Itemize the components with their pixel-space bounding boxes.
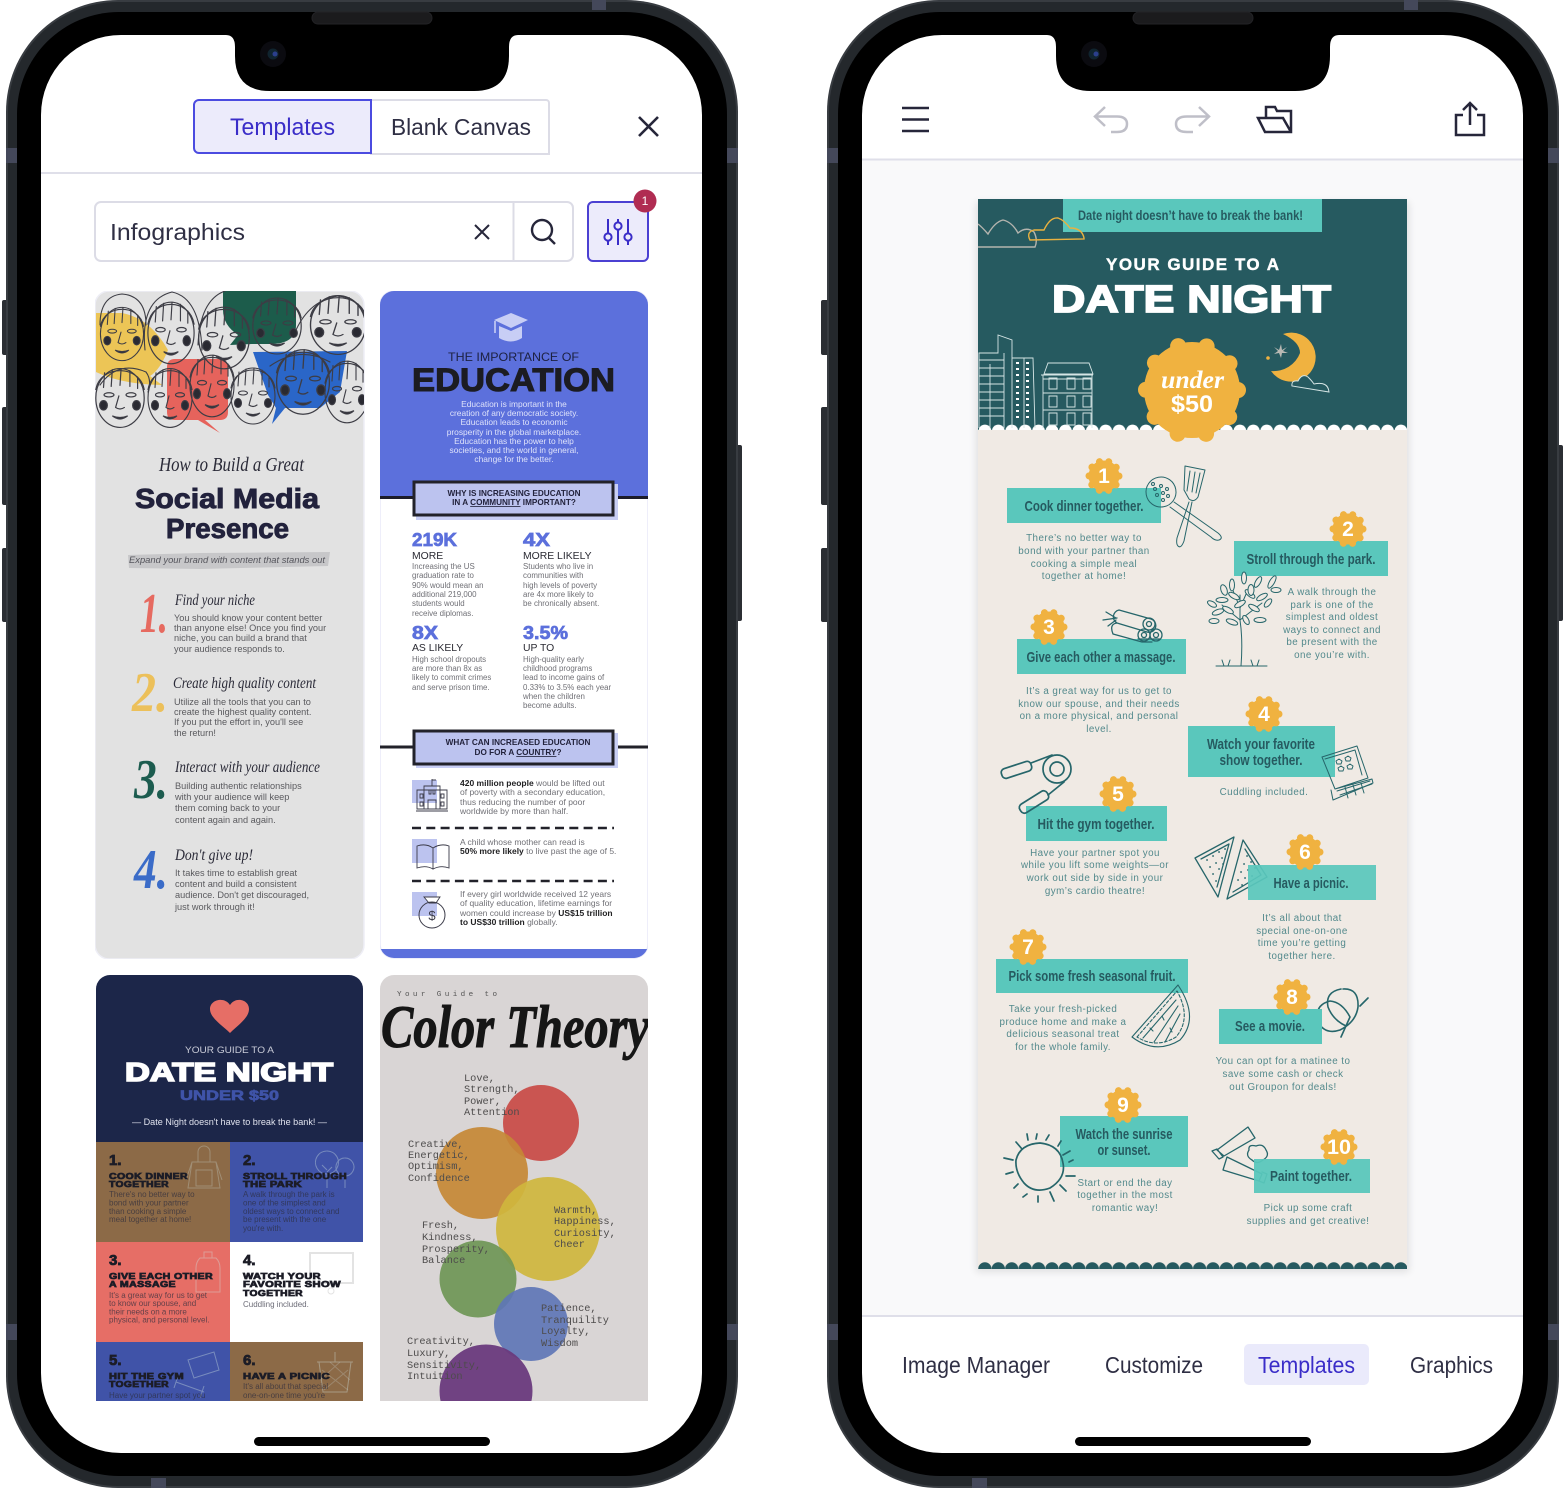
stat: 8X: 8X — [412, 623, 438, 643]
editor toolbar — [862, 103, 1523, 160]
step 5: gym: while you lift some weights—or — [1020, 860, 1169, 871]
step 5: gym: Have your partner spot you — [1030, 848, 1160, 859]
color meanings: Power, — [464, 1096, 501, 1108]
cell 2: stroll through the park: you're with. — [243, 1224, 283, 1233]
color meanings: Kindness, — [422, 1232, 478, 1244]
step 3: massage: Give each other a massage. — [1026, 649, 1176, 666]
tip 4: content and build a consistent — [175, 879, 297, 889]
stat: 3.5%: 0.33% to 3.5% each year — [523, 683, 612, 692]
step 7: seasonal fruit: Take your fresh-picked — [1009, 1004, 1117, 1015]
stat: 8X: are more than 8x as — [412, 664, 482, 673]
color theory title: Your Guide to — [397, 991, 500, 999]
callout: community question — [414, 482, 618, 520]
navy card heading: DATE NIGHT — [125, 1057, 333, 1087]
step 1: cook dinner: together at home! — [1042, 571, 1126, 582]
cell 3: massage: physical, and personal level. — [109, 1316, 210, 1324]
cell 1: cook dinner — [96, 1142, 230, 1242]
poster title — [1054, 258, 1332, 314]
step 1: cook dinner: Cook dinner together. — [1024, 498, 1144, 515]
tip 1 — [140, 583, 326, 654]
stat: 4X: communities with — [523, 571, 584, 580]
stat: 219K: 90% would mean an — [412, 581, 484, 590]
cell 3: massage — [96, 1242, 230, 1342]
cell 1: cook dinner: than cooking a simple — [109, 1207, 187, 1216]
cell 3: massage: A MASSAGE — [109, 1279, 176, 1289]
cell 6: picnic — [230, 1342, 363, 1401]
color meanings: Happiness, — [554, 1216, 616, 1228]
color meanings: Wisdom — [541, 1338, 578, 1350]
filter button: 1 — [642, 194, 649, 208]
cell 4: favorite show: 4. — [243, 1252, 256, 1269]
poster title: YOUR GUIDE TO A — [1106, 255, 1279, 274]
step 10: paint together: 10 — [1327, 1136, 1351, 1159]
card title: Social Media — [135, 483, 319, 514]
education intro text: Education has the power to help — [454, 436, 574, 446]
cell 4: favorite show: WATCH YOUR — [243, 1271, 322, 1281]
cell 6: picnic: HAVE A PICNIC — [243, 1371, 330, 1381]
cell 1: cook dinner: bond with your partner — [109, 1198, 189, 1208]
education intro text — [447, 399, 581, 464]
step 8: movie: See a movie. — [1235, 1018, 1305, 1035]
cell 1: cook dinner: meal together at home! — [109, 1215, 191, 1224]
step 4: favorite show: Watch your favorite — [1207, 736, 1315, 753]
tip 3: Building authentic relationships — [175, 781, 302, 791]
fact: 420 million people: 420 million people would be lifted out — [460, 778, 605, 788]
step 5: gym: 5 — [1112, 783, 1124, 806]
cell 2: stroll through the park: oldest ways to connect and — [243, 1207, 340, 1216]
step 1: cook dinner: There’s no better way to — [1026, 533, 1142, 544]
card title: Presence — [166, 513, 289, 544]
tip 3: content again and again. — [175, 815, 276, 825]
cell 2: stroll through the park: be present with the one — [243, 1215, 327, 1224]
stat: 3.5%: 3.5% — [523, 623, 568, 643]
color meanings: Warmth, — [554, 1205, 597, 1217]
tip 3: Interact with your audience — [174, 759, 320, 776]
color meanings: Loyalty, — [541, 1326, 590, 1338]
clouds — [978, 218, 1084, 247]
step 5: gym: gym’s cardio theatre! — [1045, 886, 1145, 897]
stat: 3.5%: High-quality early — [523, 655, 584, 664]
color meanings: Confidence — [408, 1173, 470, 1185]
color meanings: Attention — [464, 1107, 520, 1119]
fact: 420 million people — [412, 778, 605, 816]
stat: 4X: high levels of poverty — [523, 581, 597, 590]
cell 5: gym: TOGETHER — [109, 1379, 170, 1389]
icon: redo — [1176, 107, 1209, 132]
bottom tab bar: Image Manager — [902, 1352, 1050, 1378]
stat: 219K: students would — [412, 599, 465, 608]
right phone frame — [821, 0, 1563, 1488]
step 3: massage: know our spouse, and their needs — [1018, 699, 1180, 710]
icon: sun — [1004, 1134, 1075, 1202]
bottom tab bar: Graphics — [1410, 1352, 1493, 1378]
tip 1: than anyone else! Once you find your — [174, 623, 326, 633]
poster shadow — [976, 202, 1409, 1272]
illustration: crowd of faces with speech bubbles — [96, 291, 369, 433]
step 3: massage: on a more physical, and personal — [1020, 711, 1178, 722]
banner — [1063, 199, 1322, 232]
icon: pretzel — [1317, 989, 1368, 1037]
color meanings: Curiosity, — [554, 1228, 616, 1240]
step 2: stroll through the park: simplest and oldest — [1286, 612, 1378, 623]
color meanings: Balance — [422, 1255, 465, 1267]
education intro text: creation of any democratic society. — [450, 408, 578, 418]
stat: 4X: 4X — [523, 530, 550, 550]
cell 2: stroll through the park — [230, 1142, 363, 1242]
step 4: favorite show: Cuddling included. — [1220, 787, 1308, 798]
tip 4: audience. Don't get discouraged, — [175, 890, 309, 900]
navy card heading: — Date Night doesn't have to break the bank! — — [132, 1117, 327, 1127]
icon: sandwich — [1195, 837, 1267, 899]
education title: EDUCATION — [412, 362, 615, 398]
left phone header tabs: Blank Canvas — [391, 114, 531, 140]
step 6: picnic: time you’re getting — [1258, 938, 1346, 949]
card title — [128, 454, 330, 569]
illustration: city buildings — [979, 335, 1093, 428]
cell 2: stroll through the park: A walk through the park is — [243, 1190, 335, 1199]
card: date night navy — [96, 975, 363, 1401]
cell 2: stroll through the park: THE PARK — [243, 1179, 303, 1189]
stat: 8X: likely to commit crimes — [412, 673, 491, 682]
fact: mother can read — [412, 837, 616, 869]
card title: Expand your brand with content that stands out — [129, 555, 325, 565]
color circles — [436, 1085, 600, 1401]
banner: Date night doesn’t have to break the bank! — [1078, 207, 1303, 223]
color meanings: Luxury, — [407, 1348, 450, 1360]
step 9: sunrise: Start or end the day — [1077, 1178, 1173, 1189]
icon: laptop — [1322, 746, 1373, 800]
left phone header tabs: Templates — [230, 114, 335, 141]
fact: mother can read: 50% more likely to live past the age of 5. — [460, 846, 616, 856]
editor canvas background — [862, 160, 1523, 1315]
under $50 badge: under — [1161, 367, 1224, 394]
step 2: stroll through the park — [1206, 514, 1388, 666]
education intro text: change for the better. — [474, 454, 554, 464]
search bar: Infographics — [110, 219, 245, 245]
step 6: picnic — [1195, 836, 1376, 962]
card: importance of education — [380, 291, 648, 959]
cell 6: picnic: 6. — [243, 1352, 256, 1369]
stat: 3.5%: lead to income gains of — [523, 673, 605, 682]
step 8: movie: save some cash or check — [1223, 1069, 1343, 1080]
icon: share — [1456, 103, 1484, 135]
color meanings: Prosperity, — [422, 1244, 490, 1256]
step 5: gym — [1000, 755, 1169, 897]
tip 1: Find your niche — [174, 592, 255, 609]
search bar — [95, 202, 573, 261]
step 2: stroll through the park: one you’re with. — [1294, 650, 1370, 661]
fact: girl education earnings — [412, 889, 613, 928]
step 1: cook dinner — [1007, 460, 1221, 582]
stat: 3.5%: when the children — [522, 692, 585, 701]
cell 6: picnic: It's all about that special — [243, 1382, 328, 1391]
cell 2: stroll through the park: 2. — [243, 1152, 256, 1169]
color meanings: Energetic, — [408, 1150, 470, 1162]
stat: 8X — [412, 623, 491, 692]
bottom tab bar: Templates — [1258, 1352, 1355, 1378]
tip 2: Create high quality content — [173, 675, 316, 692]
tip 1: You should know your content better — [174, 613, 322, 623]
cell 5: gym: 5. — [109, 1352, 122, 1369]
tip 4: It takes time to establish great — [175, 868, 297, 878]
step 7: seasonal fruit — [996, 932, 1190, 1053]
cell 3: massage: to know our spouse, and — [109, 1299, 196, 1308]
callout: country question: DO FOR A COUNTRY? — [475, 748, 561, 757]
step 7: seasonal fruit: delicious seasonal treat — [1006, 1029, 1120, 1040]
under $50 badge: $50 — [1171, 391, 1213, 418]
fact: girl education earnings: If every girl worldwide received 12 years — [460, 889, 611, 899]
color meanings: Strength, — [464, 1084, 520, 1096]
tip 4: Don't give up! — [174, 847, 253, 864]
card title: How to Build a Great — [158, 454, 304, 476]
callout: community question: IN A COMMUNITY IMPORTANT? — [452, 498, 576, 507]
icon: menu — [902, 108, 929, 131]
tip 2: If you put the effort in, you'll see — [174, 717, 303, 727]
color meanings: Creativity, — [407, 1336, 475, 1348]
navy card heading: YOUR GUIDE TO A — [185, 1044, 275, 1055]
tip 2 — [131, 662, 316, 738]
icon: heart — [210, 1000, 249, 1033]
tip 2: 2. — [131, 662, 168, 724]
education intro text: societies, and the world in general, — [450, 445, 578, 455]
stat: 3.5%: become adults. — [523, 701, 577, 710]
tip 2: the return! — [174, 728, 216, 738]
stat: 3.5% — [522, 623, 612, 710]
step 9: sunrise — [1004, 1090, 1188, 1214]
step 7: seasonal fruit: 7 — [1022, 936, 1034, 959]
color meanings: Intuition — [407, 1371, 463, 1383]
bottom tab bar: Customize — [1105, 1352, 1203, 1378]
step 1: cook dinner: bond with your partner than — [1018, 546, 1150, 557]
fact: 420 million people: of poverty with a secondary education, — [460, 787, 605, 797]
illustration: moon and stars — [1266, 333, 1329, 392]
stat: 219K: 219K — [412, 530, 457, 550]
fact: 420 million people: worldwide by more than half. — [459, 806, 568, 816]
step 2: stroll through the park: park is one of the — [1290, 600, 1374, 611]
step 3: massage: 3 — [1043, 616, 1055, 639]
step 9: sunrise: romantic way! — [1092, 1203, 1158, 1214]
cell 4: favorite show: Cuddling included. — [243, 1300, 309, 1309]
callout: country question — [380, 731, 648, 768]
color meanings: Cheer — [554, 1239, 585, 1251]
under $50 badge — [1144, 342, 1240, 438]
step 3: massage — [1017, 610, 1186, 735]
color meanings: Tranquility — [541, 1315, 609, 1327]
left phone frame — [2, 0, 742, 1488]
color meanings — [407, 1073, 616, 1383]
cell 4: favorite show: TOGETHER — [243, 1288, 304, 1298]
hair outlines — [100, 291, 366, 392]
stat: 4X: Students who live in — [523, 562, 593, 571]
stat: 219K — [412, 530, 484, 618]
cell 3: massage: 3. — [109, 1252, 122, 1269]
icon: spoon and spatula — [1140, 466, 1221, 547]
tip 2: create the highest quality content. — [174, 707, 311, 717]
step 10: paint together — [1212, 1127, 1370, 1227]
cell 3: massage: GIVE EACH OTHER — [109, 1271, 214, 1281]
stat: 3.5%: UP TO — [523, 643, 554, 654]
tip 3 — [133, 749, 320, 825]
stat: 8X: High school dropouts — [412, 655, 486, 664]
tip 4: 4. — [133, 839, 168, 901]
stat: 8X: and serve prison time. — [412, 683, 490, 692]
stat: 219K: graduation rate to — [412, 571, 474, 580]
icon: citrus slice — [1132, 985, 1190, 1047]
step 6: picnic: together here. — [1268, 951, 1336, 962]
stat: 4X: be chronically absent. — [523, 599, 599, 608]
tip 1: your audience responds to. — [174, 644, 285, 654]
cell 1: cook dinner: TOGETHER — [109, 1179, 170, 1189]
step 10: paint together: Paint together. — [1270, 1168, 1352, 1185]
stat: 219K: MORE — [412, 551, 443, 562]
step 1: cook dinner: cooking a simple meal — [1031, 559, 1137, 570]
step 2: stroll through the park: ways to connect and — [1282, 625, 1381, 636]
tip 2: Utilize all the tools that you can to — [174, 697, 311, 707]
step 10: paint together: Pick up some craft — [1264, 1203, 1352, 1214]
step 7: seasonal fruit: produce home and make a — [1000, 1017, 1127, 1028]
step 2: stroll through the park: Stroll through the park. — [1246, 551, 1376, 568]
stat: 3.5%: childhood programs — [523, 664, 592, 673]
stat: 8X: AS LIKELY — [412, 643, 463, 654]
step 2: stroll through the park: 2 — [1342, 518, 1354, 541]
step 7: seasonal fruit: for the whole family. — [1015, 1042, 1111, 1053]
education title — [412, 350, 615, 398]
tip 1: 1. — [140, 583, 168, 645]
cell 3: massage: It's a great way for us to get — [109, 1291, 208, 1300]
tip 4 — [133, 839, 309, 912]
step 6: picnic: special one-on-one — [1256, 926, 1348, 937]
step 9: sunrise: 9 — [1117, 1094, 1129, 1117]
color theory title: Color Theory — [381, 994, 649, 1060]
step 6: picnic: 6 — [1299, 841, 1311, 864]
stat: 219K: receive diplomas. — [412, 609, 473, 618]
step 4: favorite show — [1188, 698, 1373, 800]
step 8: movie: out Groupon for deals! — [1229, 1082, 1337, 1093]
color meanings: Creative, — [408, 1139, 464, 1151]
step 6: picnic: Have a picnic. — [1274, 875, 1348, 892]
callout: community question: WHY IS INCREASING EDUCATION — [448, 489, 581, 498]
poster title: DATE NIGHT — [1052, 279, 1331, 321]
icon: undo — [1095, 107, 1127, 132]
step 9: sunrise: Watch the sunrise — [1076, 1126, 1172, 1143]
step 9: sunrise: together in the most — [1077, 1190, 1173, 1201]
icon: graduation cap — [494, 313, 528, 342]
tip 3: 3. — [133, 749, 168, 811]
step 6: picnic: It’s all about that — [1262, 913, 1342, 924]
step 10: paint together: supplies and get creative! — [1247, 1216, 1369, 1227]
cell 5: gym — [96, 1342, 230, 1401]
fact: girl education earnings: to US$30 trillion globally. — [460, 917, 558, 927]
step 1: cook dinner: 1 — [1098, 465, 1110, 488]
step 3: massage: It’s a great way for us to get to — [1026, 686, 1172, 697]
cell 5: gym: Have your partner spot you — [109, 1391, 206, 1400]
step 2: stroll through the park: be present with the — [1286, 637, 1378, 648]
education intro text: Education is important in the — [461, 399, 567, 409]
step 8: movie: 8 — [1286, 986, 1298, 1009]
color meanings: Love, — [464, 1073, 495, 1085]
stat: 4X: are 4x more likely to — [523, 590, 594, 599]
fact: mother can read: A child whose mother can read is — [460, 837, 585, 847]
cell 4: favorite show: FAVORITE SHOW — [243, 1279, 342, 1289]
fact: girl education earnings: $ — [428, 908, 436, 923]
step 7: seasonal fruit: Pick some fresh seasonal fruit. — [1008, 968, 1176, 985]
stat: 4X — [523, 530, 599, 608]
cell 6: picnic: one-on-one time you're — [243, 1391, 326, 1400]
poster: date night teal — [978, 199, 1407, 1270]
step 9: sunrise: or sunset. — [1098, 1142, 1150, 1159]
icon: folder — [1258, 107, 1291, 132]
bottom tab bar — [862, 1315, 1523, 1385]
filter button — [588, 190, 656, 261]
cell 2: stroll through the park: one of the simplest and — [243, 1198, 326, 1208]
education intro text: Education leads to economic — [460, 417, 568, 427]
step 5: gym: work out side by side in your — [1026, 873, 1164, 884]
color meanings: Fresh, — [422, 1220, 459, 1232]
step 4: favorite show: show together. — [1220, 752, 1302, 769]
navy card heading: UNDER $50 — [180, 1087, 279, 1103]
step 3: massage: level. — [1086, 724, 1112, 735]
step 2: stroll through the park: A walk through the — [1288, 587, 1376, 598]
step 5: gym: Hit the gym together. — [1038, 816, 1154, 833]
color meanings: Sensitivity, — [407, 1360, 481, 1372]
icon: towels — [1103, 610, 1162, 642]
cell 4: favorite show — [242, 1252, 354, 1308]
cell 2: stroll through the park: STROLL THROUGH — [243, 1171, 347, 1181]
tip 1: niche, you can build a brand that — [174, 633, 307, 643]
navy card heading — [125, 1044, 333, 1127]
stat: 219K: Increasing the US — [412, 562, 475, 571]
tip 3: with your audience will keep — [174, 792, 289, 802]
cell 1: cook dinner: COOK DINNER — [109, 1171, 189, 1181]
fact: girl education earnings: women could increase by US$15 trillion — [459, 908, 613, 918]
card: color theory — [380, 975, 649, 1438]
fact: girl education earnings: of quality education, lifetime earnings for — [460, 898, 612, 908]
tip 4: just work through it! — [174, 902, 255, 912]
step 8: movie: You can opt for a matinee to — [1216, 1056, 1350, 1067]
callout: country question: WHAT CAN INCREASED EDUCATION — [446, 738, 590, 747]
cell 3: massage: their needs on a more — [109, 1308, 187, 1316]
step 8: movie — [1216, 982, 1368, 1093]
fact: 420 million people: thus reducing the number of poor — [460, 797, 585, 807]
icon: hand grip — [1000, 755, 1071, 815]
education intro text: prosperity in the global marketplace. — [447, 427, 581, 437]
icon: tree — [1206, 572, 1281, 666]
tip 3: them coming back to your — [175, 803, 280, 813]
cell 5: gym: HIT THE GYM — [109, 1371, 184, 1381]
stat: 219K: additional 219,000 — [412, 590, 477, 599]
card: social media presence — [95, 291, 369, 959]
stat: 4X: MORE LIKELY — [523, 551, 592, 562]
color meanings: Patience, — [541, 1303, 597, 1315]
icon: paint tubes — [1212, 1127, 1267, 1183]
step 4: favorite show: 4 — [1258, 703, 1270, 726]
education title: THE IMPORTANCE OF — [448, 350, 579, 364]
left phone header tabs — [41, 100, 702, 174]
cell 1: cook dinner: There's no better way to — [109, 1190, 195, 1199]
cell 1: cook dinner: 1. — [109, 1152, 122, 1169]
color meanings: Optimism, — [408, 1161, 464, 1173]
